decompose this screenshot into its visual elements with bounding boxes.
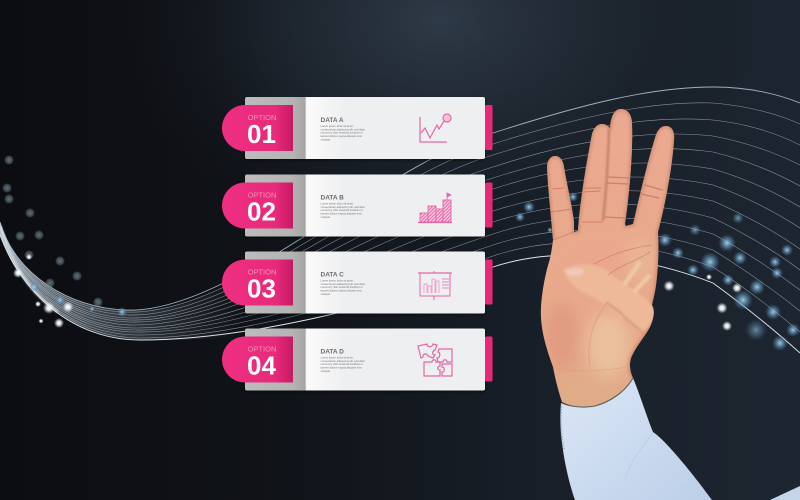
body text [320, 356, 366, 373]
body text: laoreet dolore magna aliquam erat [320, 366, 362, 370]
card 2: option 02 / data B [222, 174, 492, 236]
creases [551, 130, 662, 371]
body text: nonummy nibh euismod tincidunt ut [320, 131, 363, 135]
data heading: DATA D [320, 348, 344, 356]
right pink tab [485, 336, 492, 382]
option label: OPTION [248, 268, 276, 276]
card 1: option 01 / data A [222, 97, 492, 159]
body text: consectetuer adipiscing elit, sed diam [320, 359, 366, 363]
data heading: DATA A [320, 117, 344, 124]
body text: nonummy nibh euismod tincidunt ut [320, 362, 363, 366]
body text [320, 124, 366, 141]
body text: consectetuer adipiscing elit, sed diam [320, 205, 366, 209]
option number: 01 [247, 119, 276, 149]
body text: volutpat. [320, 215, 331, 219]
body text: Lorem ipsum dolor sit amet, [320, 278, 354, 282]
icon: presentation board [418, 271, 452, 300]
icon: puzzle pieces [418, 344, 452, 376]
body text: volutpat. [320, 369, 331, 373]
body text: volutpat. [320, 292, 331, 296]
palm shading [542, 244, 658, 379]
option number: 03 [247, 274, 276, 304]
icon: bar chart with flag [418, 193, 452, 222]
body text: laoreet dolore magna aliquam erat [320, 288, 362, 292]
right pink tab [485, 105, 492, 150]
hand [540, 109, 674, 408]
body text: volutpat. [320, 137, 331, 141]
left pink tab [222, 105, 293, 151]
body text [320, 278, 366, 296]
body text: laoreet dolore magna aliquam erat [320, 212, 362, 216]
card body [245, 328, 485, 390]
body text: laoreet dolore magna aliquam erat [320, 134, 362, 138]
glowing particles right [515, 192, 800, 351]
body text: nonummy nibh euismod tincidunt ut [320, 208, 363, 212]
thumb [563, 265, 654, 332]
data heading: DATA B [320, 194, 344, 202]
right pink tab [485, 182, 492, 228]
body text: Lorem ipsum dolor sit amet, [320, 202, 354, 206]
glowing particles left [2, 155, 127, 328]
card body [245, 252, 485, 314]
body text: consectetuer adipiscing elit, sed diam [320, 282, 366, 286]
body text: Lorem ipsum dolor sit amet, [320, 124, 354, 128]
option number: 04 [247, 350, 276, 380]
data heading: DATA C [320, 272, 344, 278]
shirt sleeve [560, 378, 800, 500]
left pink tab [222, 182, 293, 228]
hand edge shading [547, 109, 674, 378]
left pink tab [222, 336, 293, 382]
body text: Lorem ipsum dolor sit amet, [320, 356, 354, 360]
right pink tab [485, 260, 492, 304]
body text: consectetuer adipiscing elit, sed diam [320, 127, 366, 131]
body text: nonummy nibh euismod tincidunt ut [320, 285, 363, 289]
left pink tab [222, 260, 293, 306]
body text [320, 202, 366, 219]
wave lines [0, 87, 800, 353]
card body [245, 174, 485, 236]
icon: line chart [420, 114, 451, 142]
option label: OPTION [248, 190, 276, 200]
card 4: option 04 / data D [222, 328, 492, 390]
option number: 02 [247, 196, 276, 226]
option label: OPTION [248, 113, 276, 122]
option label: OPTION [248, 344, 276, 354]
card 3: option 03 / data C [222, 252, 492, 314]
card body [245, 97, 485, 159]
